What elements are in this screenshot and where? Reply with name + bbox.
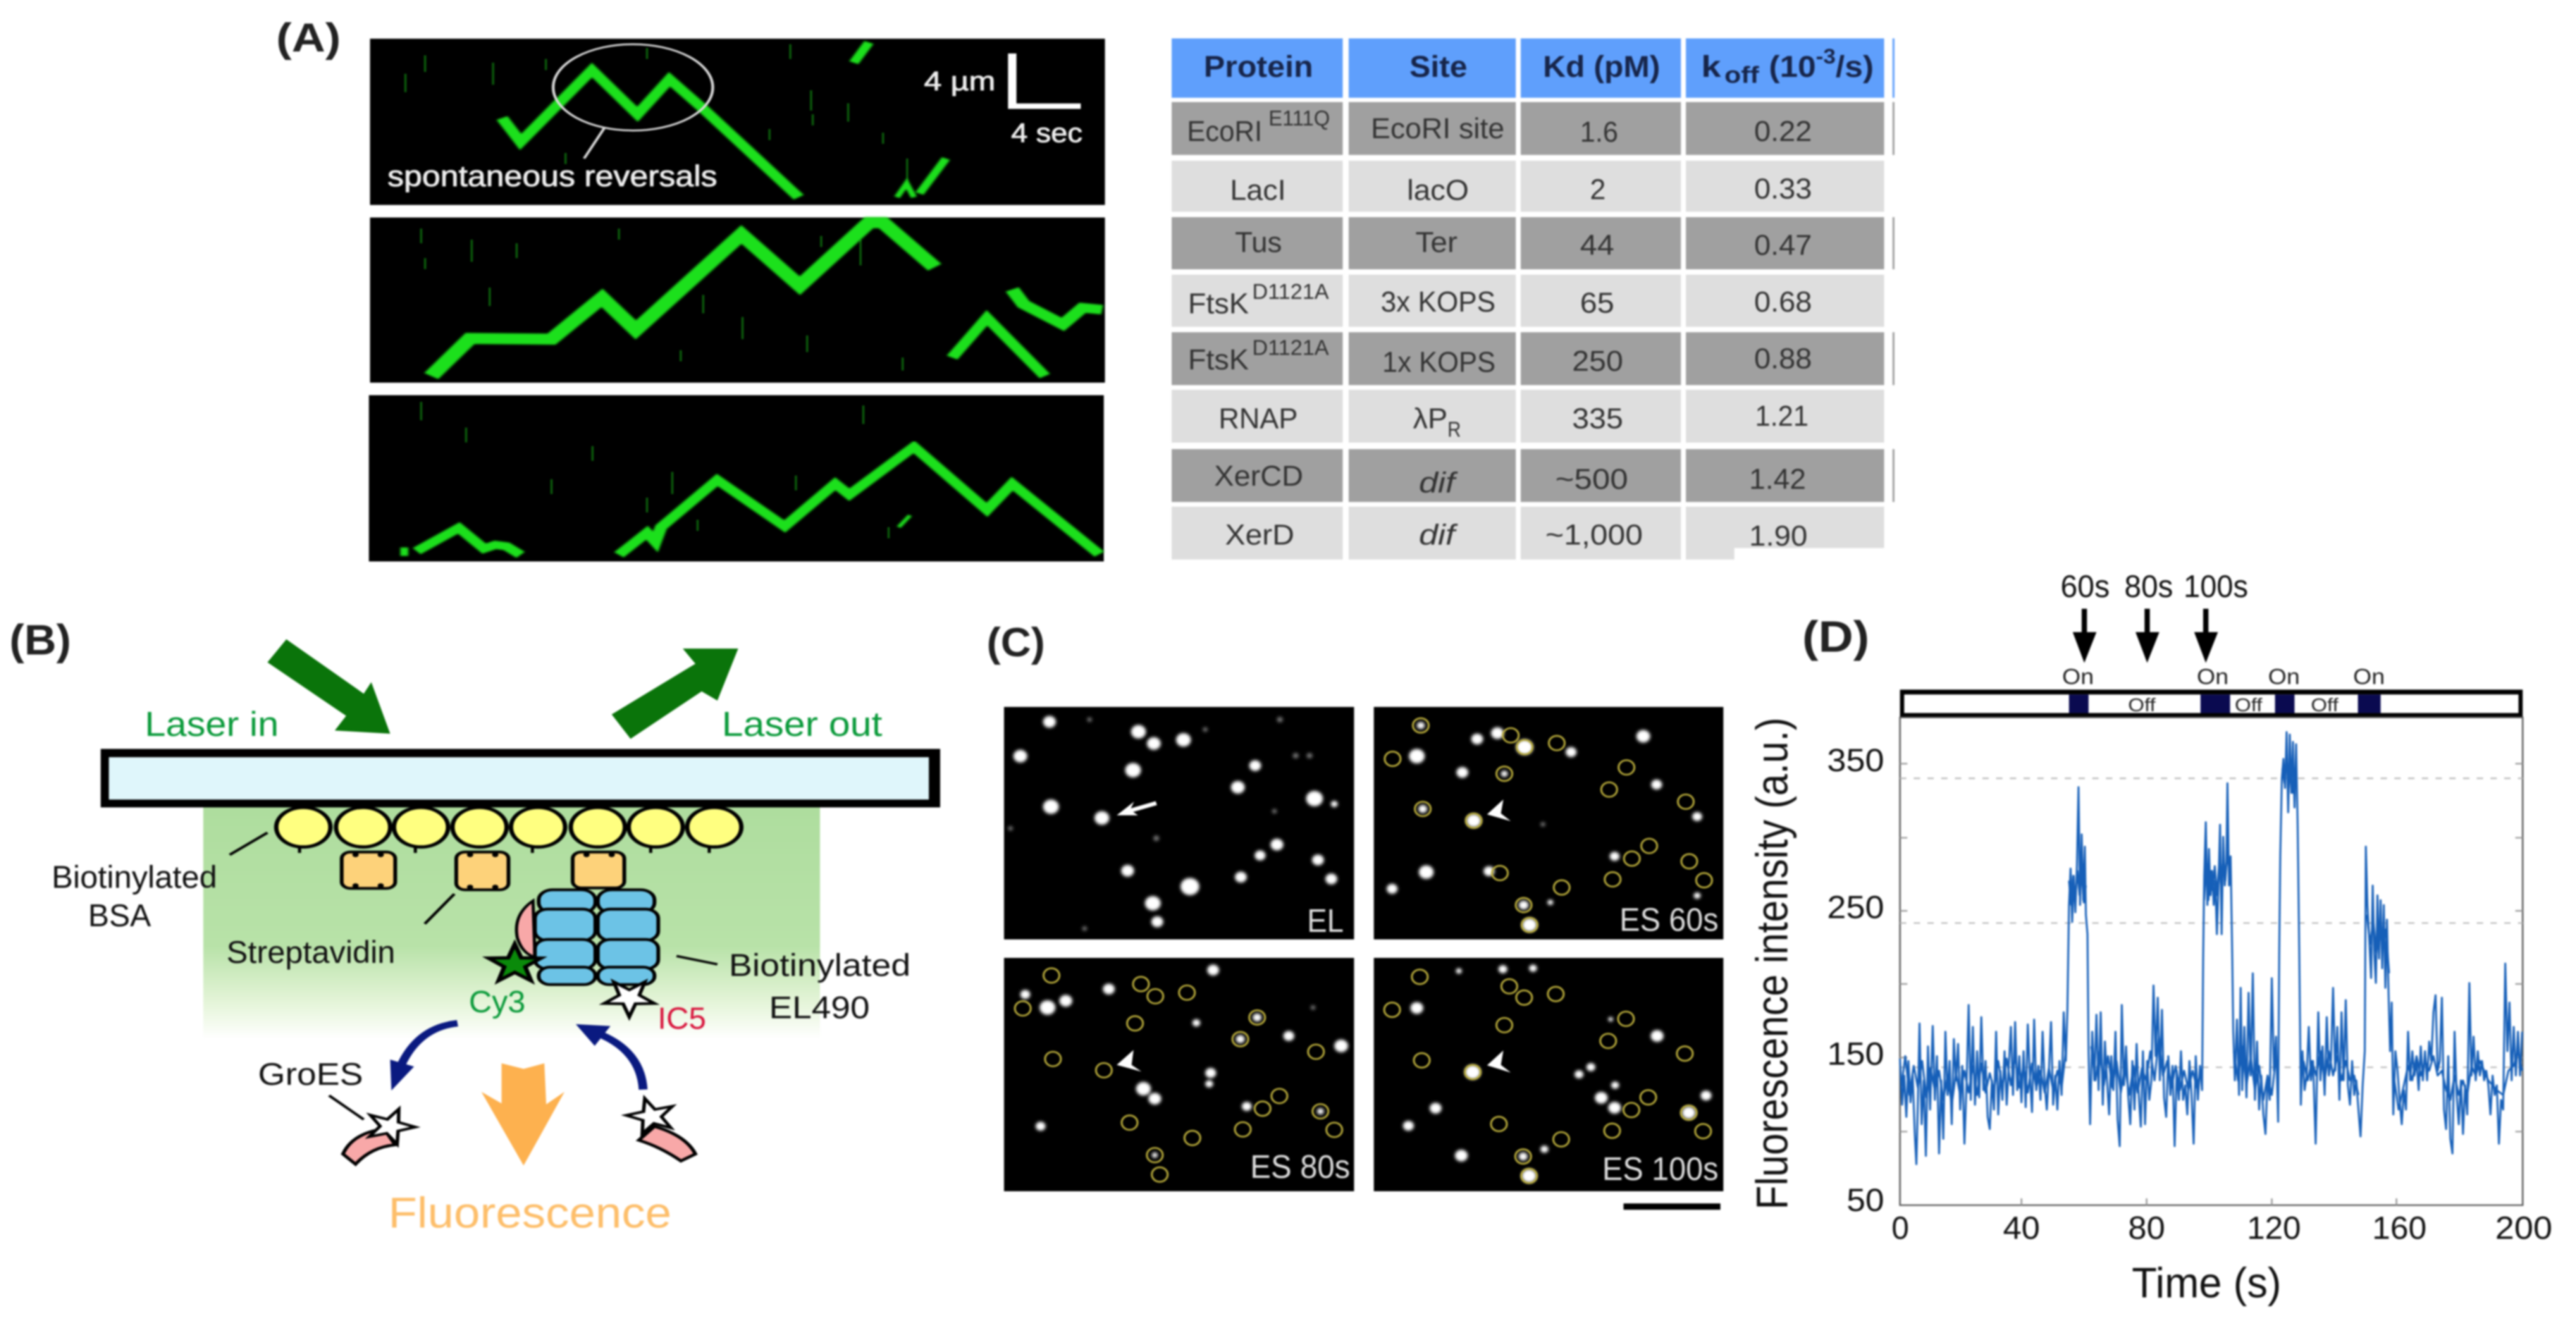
x axis labels: 160 bbox=[2372, 1210, 2427, 1246]
table row text: 335 bbox=[1572, 403, 1623, 435]
table row text: λP bbox=[1413, 403, 1448, 435]
arrow: fluorescence bbox=[481, 1064, 565, 1166]
table row text: 1x KOPS bbox=[1382, 347, 1496, 379]
x axis labels: 80 bbox=[2128, 1210, 2165, 1246]
GroEL barrel bbox=[535, 890, 658, 985]
y axis title: Fluorescence intensity (a.u.) bbox=[1747, 718, 1797, 1210]
callout leader bbox=[584, 127, 605, 159]
image ES 60s bbox=[1374, 707, 1723, 940]
panel label C: (C) bbox=[987, 620, 1045, 665]
table header text: -3 bbox=[1816, 45, 1836, 68]
table row text: ~1,000 bbox=[1546, 519, 1643, 551]
image label ES 100s: ES 100s bbox=[1602, 1151, 1718, 1187]
evanescent field bbox=[203, 806, 820, 1039]
free GroES right bbox=[622, 1094, 696, 1161]
kymograph 1 bbox=[370, 39, 1105, 205]
x axis title: Time (s) bbox=[2132, 1260, 2281, 1307]
On/Off bar: On bbox=[2197, 665, 2229, 689]
table row text: 1.90 bbox=[1749, 520, 1808, 552]
table row text: 1.6 bbox=[1580, 116, 1618, 148]
table row text: 2 bbox=[1590, 174, 1606, 206]
table row text: 3x KOPS bbox=[1381, 286, 1496, 318]
data trace bbox=[1900, 732, 2522, 1164]
table row text: ~500 bbox=[1555, 463, 1628, 495]
x axis labels: 200 bbox=[2495, 1210, 2552, 1246]
scale label time: 4 sec bbox=[1011, 118, 1083, 148]
BSA layer bbox=[276, 807, 741, 853]
time labels: 60s bbox=[2061, 569, 2109, 604]
panel label D: (D) bbox=[1802, 612, 1869, 661]
scale bar bbox=[1624, 1203, 1720, 1210]
table row text: 65 bbox=[1580, 287, 1614, 319]
y axis labels: 350 bbox=[1827, 743, 1884, 778]
table row text: RNAP bbox=[1219, 403, 1298, 435]
kymograph 3 bbox=[369, 395, 1104, 562]
table header text: off bbox=[1725, 61, 1759, 88]
On/Off bar: On bbox=[2062, 665, 2094, 689]
star: IC5 bbox=[604, 982, 655, 1017]
y axis labels: 250 bbox=[1827, 890, 1884, 926]
y axis labels: 150 bbox=[1827, 1036, 1884, 1072]
table header bbox=[1171, 38, 1894, 98]
label: biotinylated EL490 bbox=[729, 948, 911, 1026]
table row text: FtsK bbox=[1188, 344, 1249, 376]
star: Cy3 bbox=[488, 944, 541, 980]
table row text: XerCD bbox=[1214, 460, 1303, 492]
arrow white bbox=[1116, 801, 1157, 816]
table row text: R bbox=[1448, 417, 1461, 441]
arrow: laser in bbox=[267, 639, 390, 734]
table row text: Ter bbox=[1415, 227, 1458, 259]
table header text bbox=[1204, 45, 1874, 88]
x axis labels: 40 bbox=[2003, 1210, 2040, 1246]
table row text: Tus bbox=[1235, 227, 1282, 259]
plot frame bbox=[1900, 718, 2522, 1205]
table row text: 0.88 bbox=[1754, 343, 1812, 374]
y axis labels bbox=[1827, 743, 1884, 1219]
table rows background bbox=[1171, 102, 1897, 562]
table row text: 0.22 bbox=[1754, 116, 1812, 147]
table header text: /s) bbox=[1836, 49, 1874, 83]
table header text: Kd (pM) bbox=[1543, 49, 1660, 83]
callout text: spontaneous reversals bbox=[388, 160, 717, 192]
On/Off bar: Off bbox=[2311, 694, 2338, 715]
table row text: 250 bbox=[1572, 345, 1623, 377]
panel label B: (B) bbox=[9, 617, 71, 664]
label: streptavidin: Streptavidin bbox=[226, 935, 395, 970]
x axis labels: 120 bbox=[2247, 1210, 2301, 1246]
label: biotinylated BSA: Biotinylated bbox=[51, 860, 217, 895]
table header text: Site bbox=[1410, 49, 1467, 83]
table row text: dif bbox=[1419, 467, 1458, 499]
scale bar bbox=[1012, 54, 1080, 106]
label: biotinylated BSA bbox=[51, 860, 217, 933]
panel B: TIRF schematic bbox=[9, 617, 940, 1237]
table row text: LacI bbox=[1230, 175, 1286, 207]
image label ES 80s: ES 80s bbox=[1250, 1149, 1350, 1185]
label: biotinylated BSA: BSA bbox=[88, 899, 152, 933]
time labels: 100s bbox=[2183, 569, 2248, 604]
table row text: EcoRI bbox=[1187, 116, 1262, 147]
scale label distance: 4 µm bbox=[924, 67, 995, 97]
time labels bbox=[2061, 569, 2248, 604]
table row text: dif bbox=[1419, 519, 1458, 551]
table header text: (10 bbox=[1769, 49, 1816, 83]
table row text: 0.68 bbox=[1754, 286, 1812, 318]
label: Cy3: Cy3 bbox=[469, 985, 526, 1019]
panel C: microscopy images bbox=[987, 620, 1723, 1210]
image label EL: EL bbox=[1307, 903, 1343, 939]
table row text: 0.33 bbox=[1754, 173, 1812, 205]
arrow: laser out bbox=[612, 648, 738, 739]
panel label A: (A) bbox=[276, 15, 341, 61]
kymograph 2 bbox=[370, 218, 1105, 383]
streptavidin bbox=[342, 852, 624, 890]
table header text: Protein bbox=[1204, 49, 1313, 83]
arrows down bbox=[2073, 609, 2218, 663]
table row text: E111Q bbox=[1269, 106, 1330, 130]
table row text: 0.47 bbox=[1754, 230, 1812, 262]
panel D: fluorescence trace bbox=[1747, 569, 2552, 1307]
table row text: EcoRI site bbox=[1371, 113, 1505, 145]
label: laser out: Laser out bbox=[722, 706, 882, 744]
table row text: D1121A bbox=[1252, 279, 1329, 304]
label: biotinylated EL490: Biotinylated bbox=[729, 948, 911, 983]
label: biotinylated EL490: EL490 bbox=[769, 990, 870, 1026]
table: binding constants bbox=[1171, 38, 1897, 562]
table row text: 44 bbox=[1580, 230, 1614, 262]
arrow: GroES binding bbox=[576, 1024, 643, 1090]
x axis labels: 0 bbox=[1892, 1210, 1909, 1246]
x axis labels bbox=[1892, 1210, 2552, 1246]
On/Off bar: Off bbox=[2235, 694, 2262, 715]
table row text: 1.42 bbox=[1749, 463, 1806, 495]
arrow: GroES release bbox=[390, 1023, 457, 1090]
label: IC5: IC5 bbox=[658, 1001, 706, 1035]
glass slide bbox=[101, 749, 940, 807]
table row text: FtsK bbox=[1188, 288, 1249, 319]
arrowhead bbox=[1116, 1050, 1142, 1071]
On/Off bar: Off bbox=[2128, 694, 2156, 715]
free GroES left bbox=[343, 1103, 421, 1164]
label: laser in: Laser in bbox=[144, 706, 279, 744]
table row text: lacO bbox=[1407, 175, 1469, 207]
On/Off bar: On bbox=[2268, 665, 2300, 689]
On/Off bar: On bbox=[2353, 665, 2385, 689]
image EL bbox=[1004, 707, 1354, 940]
GroES bound (pink) bbox=[517, 901, 535, 957]
label: GroES: GroES bbox=[258, 1057, 363, 1092]
callout ellipse bbox=[553, 44, 713, 130]
leader lines bbox=[230, 832, 717, 1119]
image ES 80s bbox=[1004, 958, 1354, 1191]
image label ES 60s: ES 60s bbox=[1620, 902, 1718, 938]
arrowhead bbox=[1487, 799, 1511, 821]
image ES 100s bbox=[1374, 958, 1723, 1191]
label: fluorescence: Fluorescence bbox=[388, 1188, 672, 1237]
y axis labels: 50 bbox=[1847, 1183, 1884, 1219]
table row text: XerD bbox=[1225, 519, 1294, 551]
On/Off bar bbox=[1900, 665, 2522, 718]
table row text bbox=[1187, 106, 1812, 552]
table row text: 1.21 bbox=[1755, 400, 1808, 432]
panel A: kymographs bbox=[276, 15, 1105, 562]
table row text: D1121A bbox=[1252, 336, 1329, 359]
arrowhead bbox=[1487, 1050, 1511, 1073]
table header text: k bbox=[1701, 49, 1721, 83]
time labels: 80s bbox=[2124, 569, 2173, 604]
